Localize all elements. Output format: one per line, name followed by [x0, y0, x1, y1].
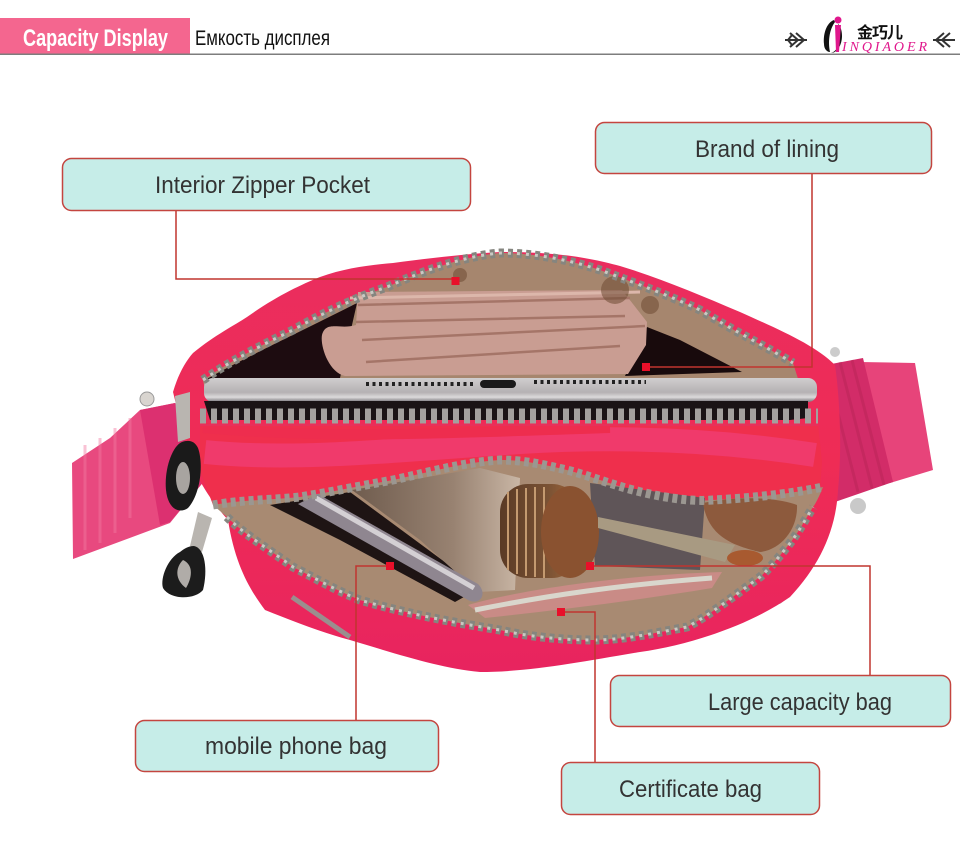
callout: interior zipper pocket [62, 158, 470, 285]
leader line [561, 612, 595, 762]
header rule [0, 54, 960, 55]
copper bottle [703, 498, 797, 552]
right strap [772, 347, 933, 604]
card stack [468, 572, 722, 618]
bag body [173, 252, 840, 672]
wallet [322, 290, 647, 376]
lower compartment zipper [213, 460, 823, 640]
leader line [356, 566, 390, 720]
callout: certificate bag [557, 608, 820, 814]
label text: Interior Zipper Pocket [155, 172, 370, 199]
header title: Capacity Display [23, 25, 168, 52]
marker [642, 363, 650, 371]
logo latin name: INQIAOER [841, 40, 927, 55]
coin stack [500, 484, 599, 578]
middle zipper [200, 416, 818, 425]
tablet [204, 378, 817, 402]
dark strip under tablet [204, 401, 808, 420]
callout: large capacity bag [586, 562, 950, 726]
logo i [834, 16, 842, 52]
logo left ornament [785, 33, 807, 47]
zipper pull upper [166, 392, 201, 511]
header pink tab [0, 18, 190, 54]
callout: mobile phone bag [136, 562, 438, 772]
marker [557, 608, 565, 616]
label text: mobile phone bag [205, 733, 387, 760]
label box [596, 122, 932, 174]
leader line [176, 210, 455, 279]
leader line [646, 174, 812, 367]
middle red panel [200, 424, 822, 505]
lower compartment opening [213, 460, 823, 640]
logo [785, 16, 955, 55]
marker [586, 562, 594, 570]
callout: brand of lining [596, 122, 932, 371]
left strap [72, 392, 205, 559]
header bar [0, 18, 960, 55]
dark right hollow [625, 327, 742, 376]
bottle [352, 468, 520, 592]
label text: Large capacity bag [708, 689, 892, 716]
label box [62, 158, 470, 210]
coins [727, 550, 763, 566]
banknote roll [598, 517, 735, 562]
label box [136, 720, 438, 772]
dark left hollow [205, 303, 357, 380]
logo right ornament [933, 33, 955, 47]
marker [386, 562, 394, 570]
label text: Brand of lining [695, 136, 839, 163]
bag illustration [72, 252, 933, 672]
grey inner tube [590, 483, 705, 570]
header subtitle: Емкость дисплея [195, 27, 330, 50]
logo mark [824, 20, 842, 53]
zipper pull lower [162, 512, 212, 597]
lining print [453, 268, 659, 314]
label text: Certificate bag [619, 776, 762, 803]
dark phone shadow [270, 492, 480, 602]
lower pocket zip trim [292, 597, 350, 637]
leader line [590, 566, 870, 675]
marker [452, 277, 460, 285]
label box [562, 762, 820, 814]
logo chinese name: 金巧儿 [857, 19, 903, 43]
upper compartment opening [203, 253, 800, 385]
upper compartment zipper [203, 253, 793, 380]
label box [610, 676, 950, 726]
phone [298, 494, 483, 602]
